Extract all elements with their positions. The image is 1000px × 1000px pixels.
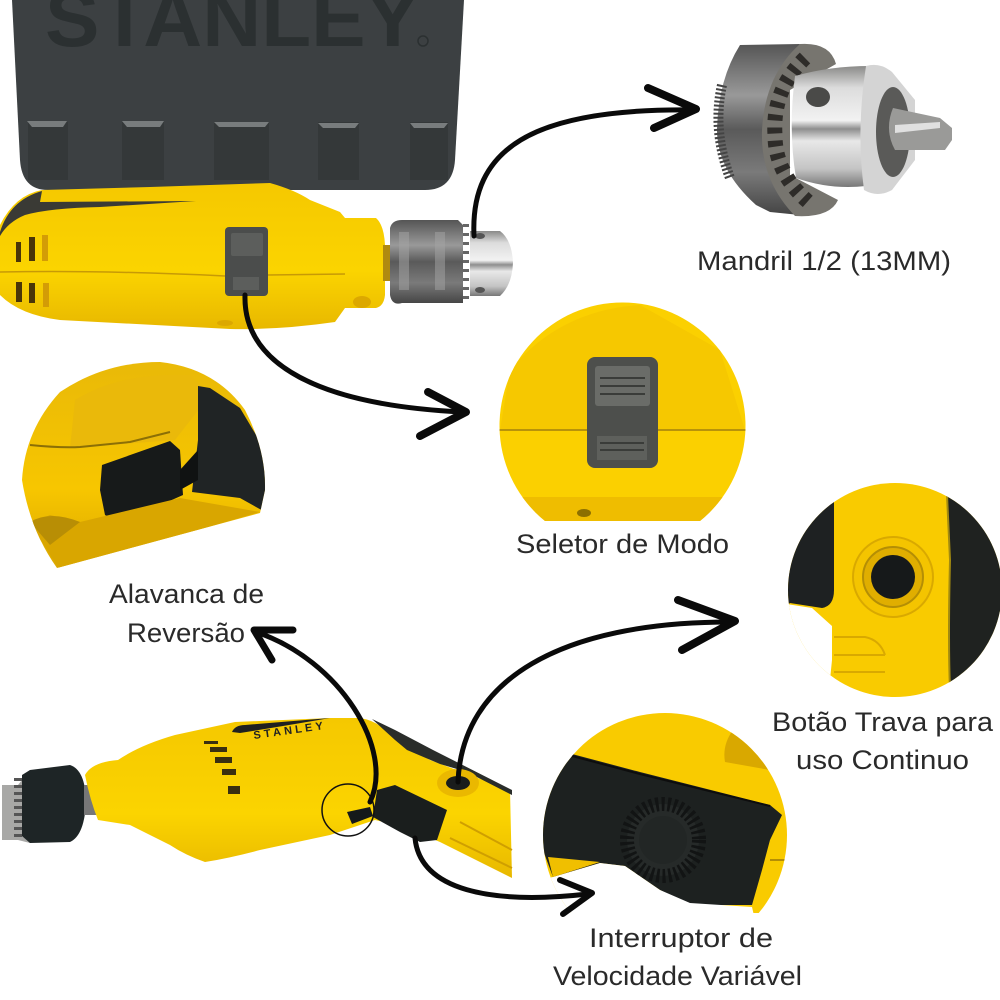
arrow: to reversal lever — [254, 630, 376, 802]
arrow: to mode selector — [245, 295, 466, 436]
chuck detail image — [717, 44, 952, 216]
label: reversal lever — [109, 579, 264, 648]
mode selector detail — [499, 299, 746, 522]
label: lock button: Botão Trava para — [772, 707, 994, 737]
label: speed switch — [553, 923, 802, 991]
arrow: to speed switch — [415, 838, 592, 914]
label: reversal lever: Alavanca de — [109, 579, 264, 609]
speed switch detail — [540, 713, 788, 920]
vents — [16, 237, 35, 303]
drill brand name: STANLEY — [253, 720, 324, 742]
label: speed switch: Velocidade Variável — [553, 961, 802, 991]
label: reversal lever: Reversão — [127, 618, 245, 648]
chuck — [383, 245, 393, 281]
label: speed switch: Interruptor de — [589, 923, 773, 953]
label: mode selector: Seletor de Modo — [516, 529, 729, 559]
drill case — [12, 0, 464, 190]
label: lock button: uso Continuo — [796, 745, 969, 775]
label: chuck: Mandril 1/2 (13MM) — [697, 246, 951, 276]
mode selector — [225, 227, 268, 296]
drill bottom — [2, 718, 512, 878]
arrow: to lock button — [458, 600, 735, 782]
reversal lever detail — [20, 360, 270, 575]
label: lock button — [772, 707, 994, 775]
arrow: to chuck detail — [474, 88, 696, 236]
drill top — [0, 183, 513, 329]
lock button detail — [780, 483, 1000, 700]
